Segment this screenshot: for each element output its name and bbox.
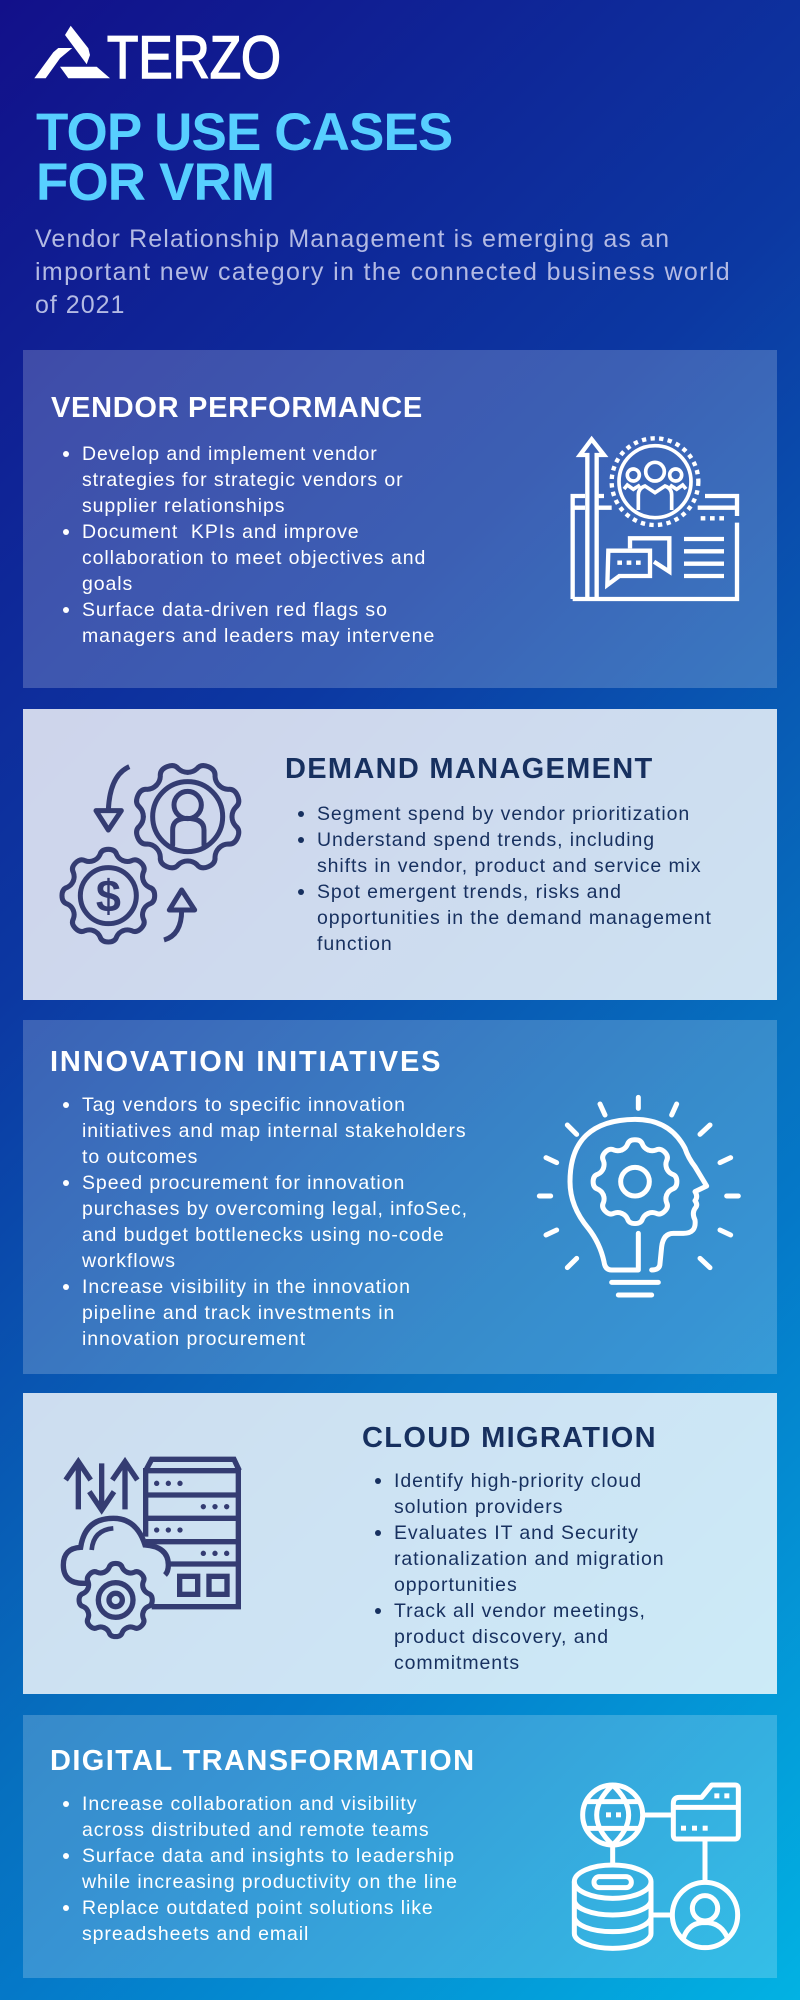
bullet list: demand management: Spot emergent trends, risks and [317,881,622,903]
title: FOR VRM [36,153,274,212]
bullet list: vendor performance: Surface data-driven red flags so [82,599,388,621]
bullet list: digital transformation [63,1793,458,1945]
bullet list: digital transformation: Surface data and insights to leadership [82,1845,455,1867]
bullet list: demand management: opportunities in the demand management [317,907,712,929]
subtitle [35,225,731,319]
bullet list: demand management: function [317,933,393,955]
bullet list: vendor performance: strategies for strategic vendors or [82,469,404,491]
heading: demand management: DEMAND MANAGEMENT [285,753,653,785]
icon: connected globe, folder, database and user [572,1782,741,1951]
bullet list: cloud migration: opportunities [394,1574,518,1596]
bullet list: innovation initiatives: Increase visibility in the innovation [82,1276,411,1298]
icon: performance folder with team [570,436,740,602]
bullet list: vendor performance [63,443,435,647]
bullet list: digital transformation: while increasing productivity on the line [82,1871,458,1893]
subtitle: important new category in the connected business world [35,258,731,286]
bullet list: digital transformation: Replace outdated point solutions like [82,1897,434,1919]
panel: demand management [23,709,777,1000]
bullet list: cloud migration [375,1470,665,1674]
subtitle: of 2021 [35,291,125,319]
bullet list: innovation initiatives: and budget bottlenecks using no-code [82,1224,445,1246]
bullet list: vendor performance: managers and leaders may intervene [82,625,435,647]
bullet list: innovation initiatives: Tag vendors to specific innovation [82,1094,406,1116]
bullet list: cloud migration: product discovery, and [394,1626,609,1648]
bullet list: vendor performance: Develop and implement vendor [82,443,378,465]
bullet list: innovation initiatives: Speed procurement for innovation [82,1172,405,1194]
panel: innovation initiatives [23,1020,777,1374]
bullet list: demand management: Segment spend by vendor prioritization [317,803,690,825]
subtitle: Vendor Relationship Management is emerging as an [35,225,670,253]
bullet list: cloud migration: solution providers [394,1496,563,1518]
panel: cloud migration [23,1393,777,1694]
bullet list: digital transformation: Increase collaboration and visibility [82,1793,417,1815]
bullet list: innovation initiatives [63,1094,468,1350]
bullet list: innovation initiatives: innovation procurement [82,1328,306,1350]
heading: innovation initiatives: INNOVATION INITIATIVES [50,1046,442,1078]
logo: Terzo: TERZO [107,24,281,91]
icon: gears with person and dollar [59,763,242,944]
icon: gears with person and dollar: $ [96,871,121,922]
heading: digital transformation: DIGITAL TRANSFORMATION [50,1745,476,1777]
bullet list: cloud migration: Identify high-priority cloud [394,1470,642,1492]
bullet list: innovation initiatives: to outcomes [82,1146,198,1168]
panel: digital transformation [23,1715,777,1978]
bullet list: cloud migration: rationalization and migration [394,1548,665,1570]
bullet list: innovation initiatives: initiatives and map internal stakeholders [82,1120,467,1142]
bullet list: demand management: shifts in vendor, product and service mix [317,855,702,877]
bullet list: demand management [298,803,712,955]
title: TOP USE CASES [36,103,452,162]
bullet list: vendor performance: supplier relationships [82,495,285,517]
bullet list: digital transformation: across distributed and remote teams [82,1819,430,1841]
bullet list: cloud migration: commitments [394,1652,520,1674]
bullet list: cloud migration: Track all vendor meetings, [394,1600,646,1622]
heading: cloud migration: CLOUD MIGRATION [362,1422,657,1454]
bullet list: demand management: Understand spend trends, including [317,829,655,851]
icon: cloud server with gear [60,1456,242,1640]
bullet list: vendor performance: collaboration to meet objectives and [82,547,426,569]
icon: lightbulb head with gear [536,1094,741,1298]
logo: Terzo [34,24,281,91]
bullet list: innovation initiatives: workflows [82,1250,176,1272]
bullet list: cloud migration: Evaluates IT and Security [394,1522,639,1544]
bullet list: vendor performance: Document KPIs and improve [82,521,360,543]
bullet list: vendor performance: goals [82,573,133,595]
bullet list: digital transformation: spreadsheets and email [82,1923,309,1945]
bullet list: innovation initiatives: purchases by overcoming legal, infoSec, [82,1198,468,1220]
bullet list: innovation initiatives: pipeline and track investments in [82,1302,395,1324]
panel: vendor performance [23,350,777,688]
title [36,103,452,212]
heading: vendor performance: VENDOR PERFORMANCE [51,392,423,424]
